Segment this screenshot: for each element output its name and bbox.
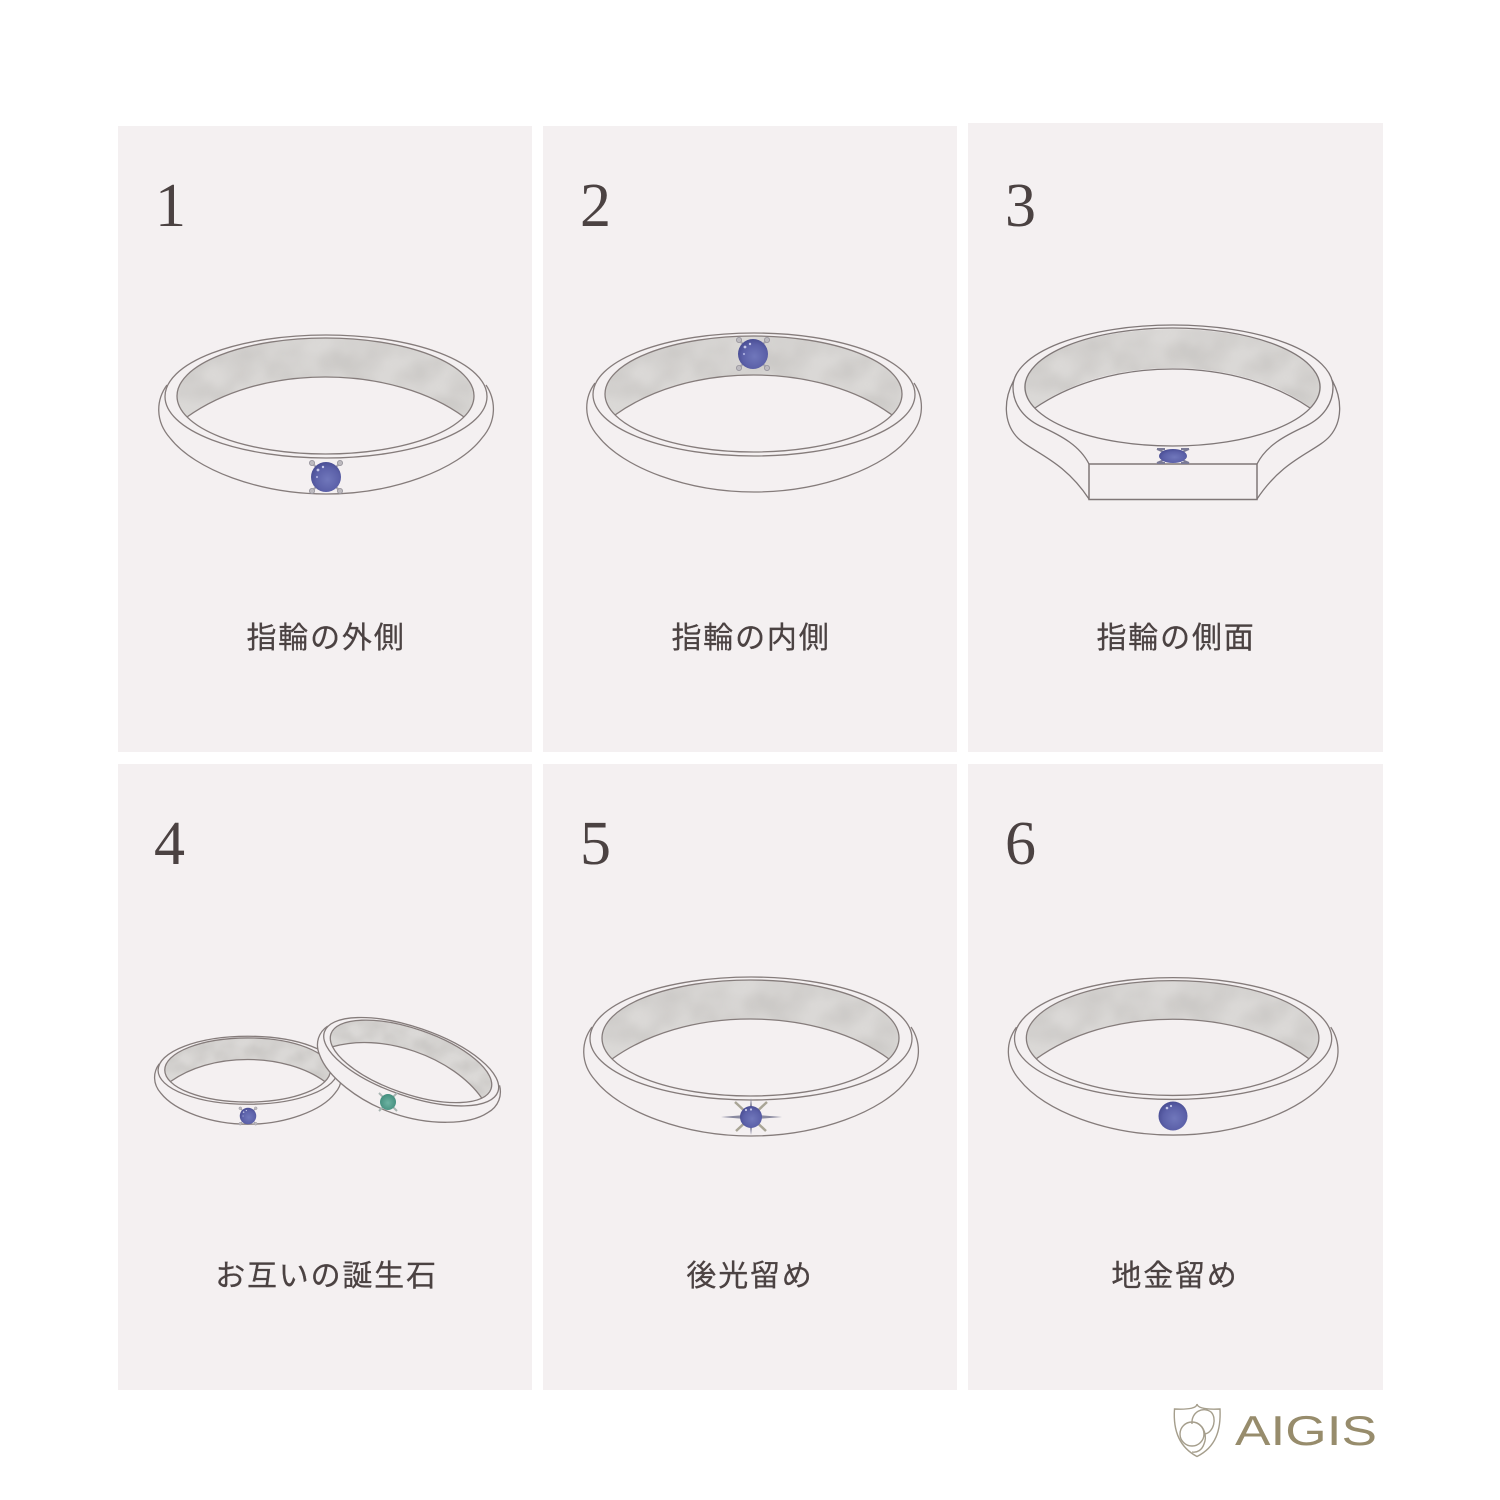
- panel 1: outside of ring: [118, 126, 532, 752]
- panel 6: flush setting: [968, 764, 1383, 1390]
- ring illustration 2: [587, 333, 921, 492]
- panel 4: each other's birthstones: [118, 764, 532, 1390]
- icon: flush-set gem: [1158, 1102, 1188, 1130]
- wordmark: AIGIS: [1235, 1407, 1377, 1454]
- number 2: 2: [580, 172, 611, 240]
- panel 1 background: [118, 126, 532, 752]
- icon: side-set gem: [1157, 449, 1189, 463]
- label 6: 地金留め: [1111, 1260, 1239, 1293]
- small ring with purple gem: [155, 1036, 341, 1125]
- label 2: 指輪の内側: [672, 622, 830, 655]
- panel 6 background: [968, 764, 1383, 1390]
- tilted ring with green gem: [303, 998, 513, 1144]
- icon: star-set gem: [721, 1098, 782, 1135]
- number 1: 1: [155, 172, 186, 240]
- label 3: 指輪の側面: [1096, 622, 1256, 655]
- logo: AIGIS: [1174, 1404, 1377, 1456]
- number 6: 6: [1005, 810, 1036, 878]
- pair of rings illustration: [155, 998, 513, 1144]
- label 1: 指輪の外側: [246, 622, 406, 655]
- icon: shield emblem: [1174, 1404, 1220, 1456]
- ring illustration 1: [159, 335, 493, 494]
- panel 2: inside of ring: [543, 126, 957, 752]
- number 5: 5: [580, 810, 611, 878]
- number 4: 4: [154, 810, 185, 878]
- number 3: 3: [1005, 172, 1036, 240]
- ring illustration 5: [584, 977, 918, 1136]
- panel 3 background: [968, 123, 1383, 752]
- panel 5: star setting: [543, 764, 957, 1390]
- label 4: お互いの誕生石: [215, 1260, 438, 1293]
- panel 3: side of ring: [968, 123, 1383, 752]
- panel 4 background: [118, 764, 532, 1390]
- ring illustration 6: [1008, 978, 1338, 1135]
- panel 5 background: [543, 764, 957, 1390]
- ring illustration 3: [1006, 325, 1340, 500]
- label 5: 後光留め: [686, 1260, 814, 1293]
- panel 2 background: [543, 126, 957, 752]
